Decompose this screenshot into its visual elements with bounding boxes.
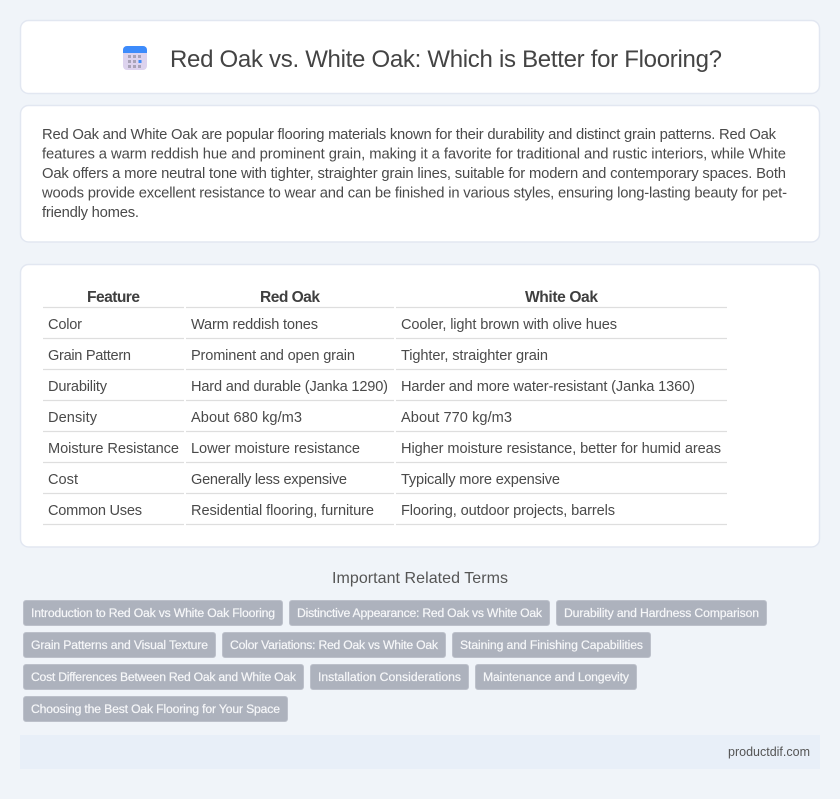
row: durability: Hard and durable (Janka 1290) bbox=[191, 379, 388, 395]
tag: Distinctive Appearance: Red Oak vs White Oak bbox=[297, 606, 543, 620]
tag: Color Variations: Red Oak vs White Oak bbox=[230, 638, 439, 652]
row: grain pattern: Tighter, straighter grain bbox=[401, 348, 548, 364]
table header bbox=[87, 289, 598, 306]
row: durability bbox=[48, 379, 695, 395]
tag: Grain Patterns and Visual Texture bbox=[31, 638, 208, 652]
row: moisture resistance: Higher moisture resistance, better for humid areas bbox=[401, 441, 721, 457]
row: color: Cooler, light brown with olive hues bbox=[401, 317, 617, 333]
row: grain pattern bbox=[48, 348, 548, 364]
tag bbox=[24, 600, 282, 626]
row: cost bbox=[48, 472, 560, 488]
row: moisture resistance: Moisture Resistance bbox=[48, 441, 179, 457]
table header: Red Oak bbox=[260, 289, 320, 306]
panel: comparison table bbox=[20, 264, 820, 547]
intro paragraph: woods provide excellent resistance to wear and can be finished in various styles, ensuring long-lasting beauty for pet- bbox=[41, 186, 787, 202]
tag: Cost Differences Between Red Oak and White Oak bbox=[31, 670, 297, 684]
title: Red Oak vs. White Oak: Which is Better for Flooring? bbox=[170, 46, 722, 73]
row: color: Warm reddish tones bbox=[191, 317, 318, 333]
table rules bbox=[43, 308, 727, 524]
tag bbox=[556, 600, 766, 626]
tag: Installation Considerations bbox=[318, 670, 461, 684]
tag bbox=[24, 696, 288, 722]
row: color bbox=[48, 317, 617, 333]
table header: Feature bbox=[87, 289, 140, 306]
row: common uses: Common Uses bbox=[48, 503, 142, 519]
heading: related terms: Important Related Terms bbox=[332, 570, 508, 587]
row: common uses: Residential flooring, furniture bbox=[191, 503, 374, 519]
panel: introduction bbox=[20, 106, 820, 242]
footer source: productdif.com bbox=[728, 745, 810, 759]
tag bbox=[290, 600, 550, 626]
intro paragraph: Red Oak and White Oak are popular flooring materials known for their durability and distinct grain patterns. Red Oak bbox=[42, 127, 777, 143]
intro paragraph bbox=[41, 127, 787, 221]
row: common uses: Flooring, outdoor projects, barrels bbox=[401, 503, 615, 519]
tag bbox=[476, 664, 636, 690]
header panel bbox=[20, 20, 820, 94]
tag: Maintenance and Longevity bbox=[483, 670, 630, 684]
tag: Choosing the Best Oak Flooring for Your Space bbox=[31, 702, 280, 716]
row: color: Color bbox=[48, 317, 82, 333]
row: grain pattern: Prominent and open grain bbox=[191, 348, 355, 364]
row: cost: Cost bbox=[48, 472, 78, 488]
row: moisture resistance: Lower moisture resistance bbox=[191, 441, 360, 457]
tag bbox=[222, 632, 446, 658]
row: cost: Generally less expensive bbox=[191, 472, 347, 488]
table header: White Oak bbox=[525, 289, 598, 306]
row: common uses bbox=[48, 503, 615, 519]
row: density: Density bbox=[48, 410, 98, 426]
row: grain pattern: Grain Pattern bbox=[48, 348, 131, 364]
tag bbox=[310, 664, 468, 690]
row: density bbox=[48, 410, 512, 426]
row: density: About 770 kg/m3 bbox=[401, 410, 512, 426]
intro paragraph: features a warm reddish hue and prominent grain, making it a favorite for traditional and rustic interiors, while White bbox=[42, 146, 786, 162]
row: density: About 680 kg/m3 bbox=[191, 410, 302, 426]
intro paragraph: friendly homes. bbox=[42, 205, 139, 221]
tag: Durability and Hardness Comparison bbox=[564, 606, 759, 620]
tag bbox=[452, 632, 650, 658]
related term tags bbox=[24, 600, 766, 722]
row: durability: Durability bbox=[48, 379, 108, 395]
row: durability: Harder and more water-resistant (Janka 1360) bbox=[401, 379, 695, 395]
row: moisture resistance bbox=[48, 441, 721, 457]
tag: Staining and Finishing Capabilities bbox=[460, 638, 643, 652]
footer bar bbox=[20, 735, 820, 769]
icon: calendar bbox=[123, 46, 147, 70]
intro paragraph: Oak offers a more neutral tone with tighter, straighter grain lines, suitable for modern and contemporary spaces. Both bbox=[42, 166, 786, 182]
tag: Introduction to Red Oak vs White Oak Flooring bbox=[31, 606, 275, 620]
row: cost: Typically more expensive bbox=[401, 472, 560, 488]
tag bbox=[24, 664, 304, 690]
tag bbox=[24, 632, 216, 658]
